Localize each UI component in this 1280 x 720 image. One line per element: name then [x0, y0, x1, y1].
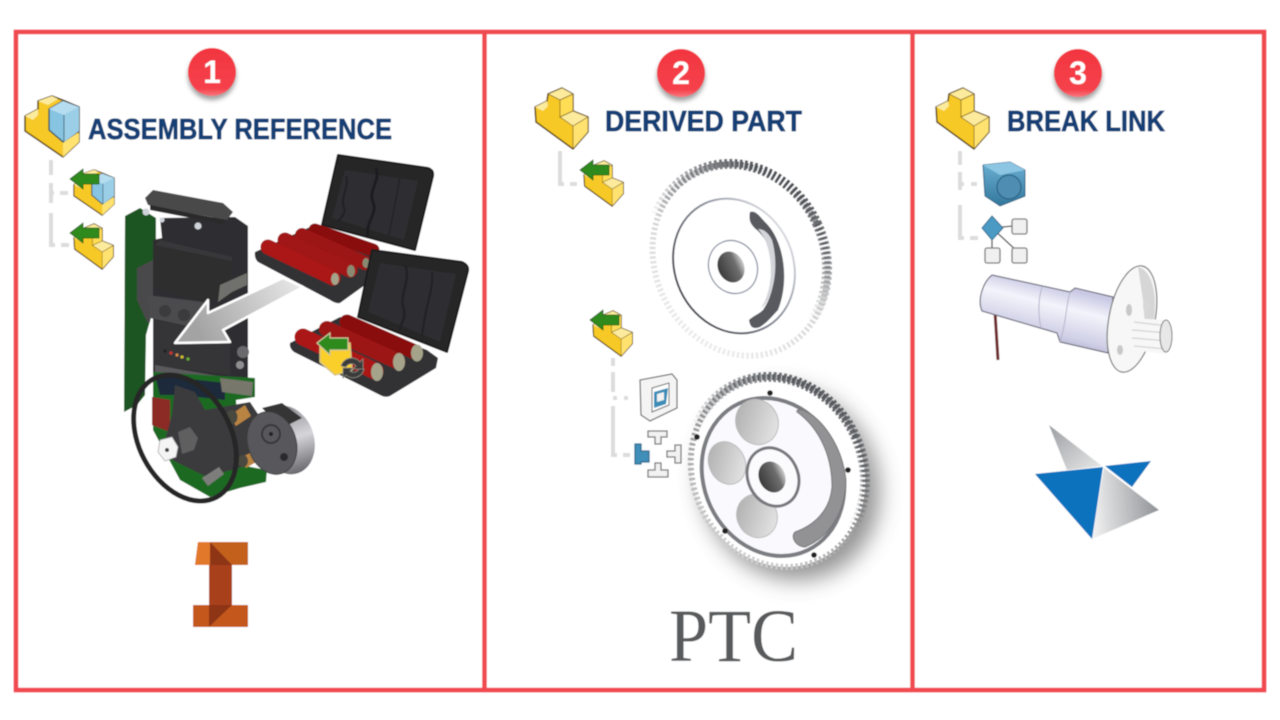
- icon: assembly part: [25, 96, 79, 157]
- badge: number 2: 2: [672, 55, 690, 91]
- logo: PTC: PTC: [669, 595, 798, 678]
- illustration: robot assembly: [113, 190, 323, 519]
- heading: derived part: DERIVED PART: [605, 106, 802, 138]
- illustration: battery box rear: [255, 155, 433, 303]
- icon: base solid: [983, 162, 1025, 206]
- heading: assembly reference: ASSEMBLY REFERENCE: [88, 114, 392, 146]
- arrow: insert batteries: [175, 278, 303, 343]
- icon: pattern feature: [635, 431, 681, 477]
- feature tree connector: [560, 151, 577, 184]
- icon: part: [535, 88, 588, 149]
- feature tree connector lower: [613, 358, 630, 455]
- icon: derived feature lower: [590, 310, 632, 356]
- illustration: rendered gear: [658, 348, 911, 610]
- icon: update derived part: [317, 333, 364, 378]
- badge: number 3: [1054, 49, 1102, 101]
- icon: derived part feature: [70, 223, 113, 269]
- illustration: battery box front: [290, 250, 468, 397]
- icon: part: [936, 88, 989, 149]
- badge: number 1: 1: [203, 54, 221, 90]
- icon: shell feature: [640, 374, 677, 421]
- badge: number 1: [188, 48, 236, 100]
- icon: derived feature: [580, 160, 623, 206]
- feature tree connector: [960, 151, 978, 238]
- logo: CATIA triangles: [1035, 425, 1159, 539]
- feature tree connector: [51, 160, 69, 245]
- panel: derived part: [535, 49, 911, 678]
- logo: Autodesk Inventor: [193, 542, 248, 627]
- badge: number 2: [657, 49, 705, 101]
- illustration: motor: [980, 262, 1172, 376]
- illustration: outline gear: [618, 134, 858, 386]
- badge: number 3: 3: [1069, 55, 1087, 91]
- panel: assembly reference: [25, 48, 468, 627]
- icon: imported structure tree: [982, 216, 1027, 263]
- heading: break link: BREAK LINK: [1007, 106, 1165, 138]
- icon: derived assembly feature: [70, 169, 114, 215]
- panel: break link: [936, 49, 1172, 539]
